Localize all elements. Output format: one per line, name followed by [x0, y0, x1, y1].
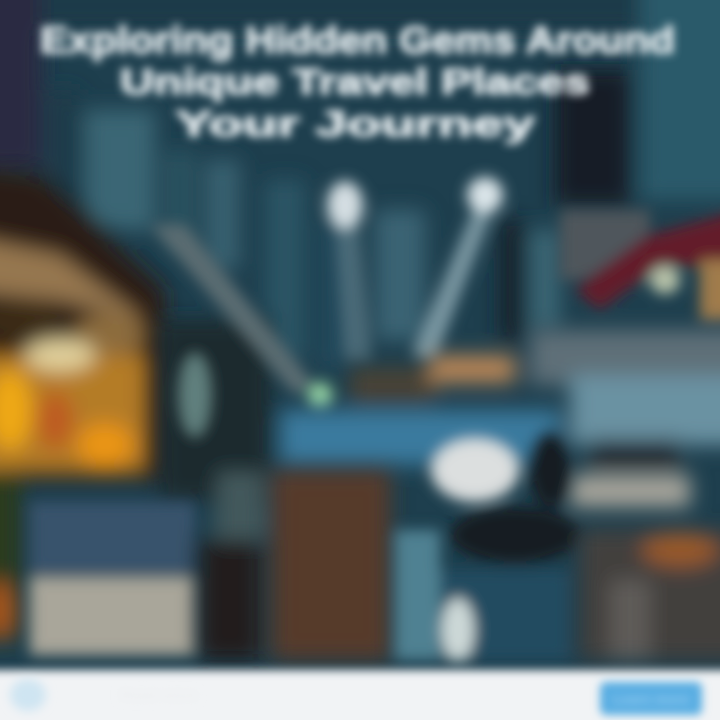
- footer icon: left blue blob: [10, 679, 46, 711]
- hut: left building with glowing interior: [0, 165, 165, 640]
- footer button: [600, 682, 702, 715]
- green marker dot: [307, 382, 333, 408]
- spotlight beams: [327, 177, 503, 360]
- central waterfront: [280, 330, 720, 507]
- title: [40, 20, 675, 144]
- city skyline backdrop: [0, 0, 720, 370]
- beam: right spotlight: [412, 205, 495, 360]
- dark figure: [450, 432, 580, 563]
- white boat: [431, 438, 519, 502]
- diagonal road line: [150, 225, 315, 395]
- title line 3: Your Journey: [175, 103, 535, 144]
- red roof, right: [575, 205, 720, 320]
- footer text: Read more: [120, 687, 198, 704]
- beam: left spotlight: [335, 215, 372, 360]
- footer bar: [0, 670, 720, 720]
- footer button: Learn more: [613, 691, 689, 707]
- spotlight: left lamp: [327, 181, 363, 229]
- lantern glow beside hut: [179, 353, 211, 437]
- brown central building: [200, 470, 390, 660]
- grey tower, right: [560, 210, 650, 280]
- dark column beside hut: [160, 320, 270, 500]
- right bottom market: [580, 530, 720, 660]
- light teal canal: [395, 530, 570, 662]
- spotlight: right lamp: [467, 177, 503, 213]
- panel: left bottom card: [30, 502, 195, 655]
- title line 1: Exploring Hidden Gems Around: [40, 20, 675, 62]
- title line 2: Unique Travel Places: [120, 61, 590, 102]
